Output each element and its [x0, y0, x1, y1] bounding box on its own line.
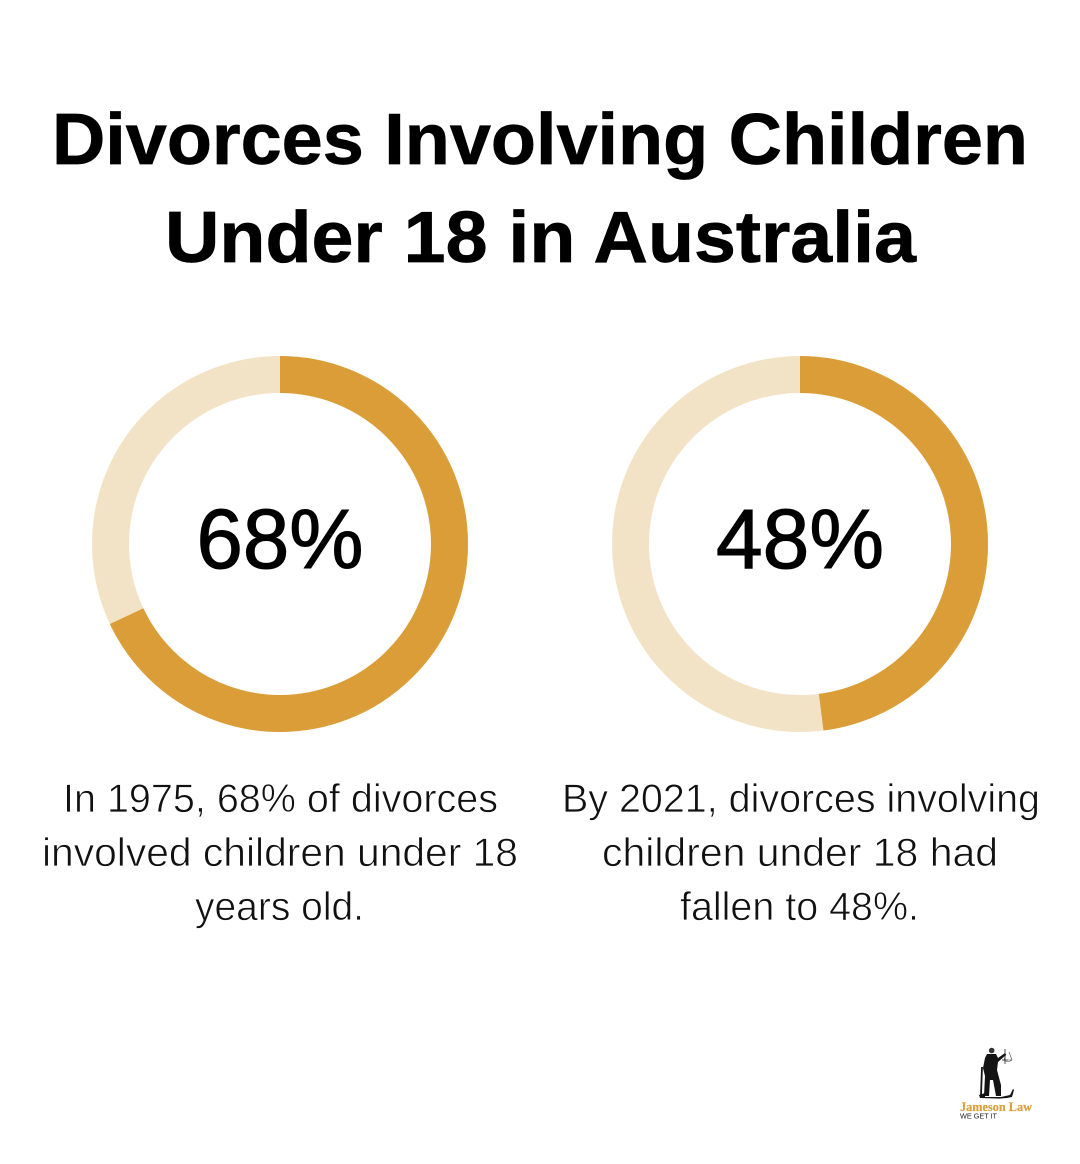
description: 1975: years old. [195, 885, 364, 929]
description: 1975 [42, 777, 518, 929]
logo: Jameson Law [960, 1048, 1032, 1120]
title: Under 18 in Australia [165, 198, 917, 278]
panel: 1975 statistic [42, 374, 518, 929]
description: 2021: fallen to 48%. [680, 885, 919, 929]
brand name: Jameson Law [960, 1100, 1032, 1114]
donut chart: 48% [630, 374, 970, 714]
description: 2021: By 2021, divorces involving [562, 777, 1040, 821]
tagline: WE GET IT [960, 1112, 997, 1120]
value: 48%: 48% [716, 492, 884, 586]
panel: 2021 statistic [562, 374, 1040, 929]
description: 1975: involved children under 18 [42, 831, 518, 875]
icon: lady justice with scales [979, 1048, 1014, 1099]
donut chart: 68% [110, 374, 450, 714]
description: 1975: In 1975, 68% of divorces [63, 777, 498, 821]
description: 2021: children under 18 had [602, 831, 998, 875]
title [52, 100, 1028, 278]
value: 68%: 68% [196, 492, 364, 586]
description: 2021 [562, 777, 1040, 929]
title: Divorces Involving Children [52, 100, 1028, 180]
